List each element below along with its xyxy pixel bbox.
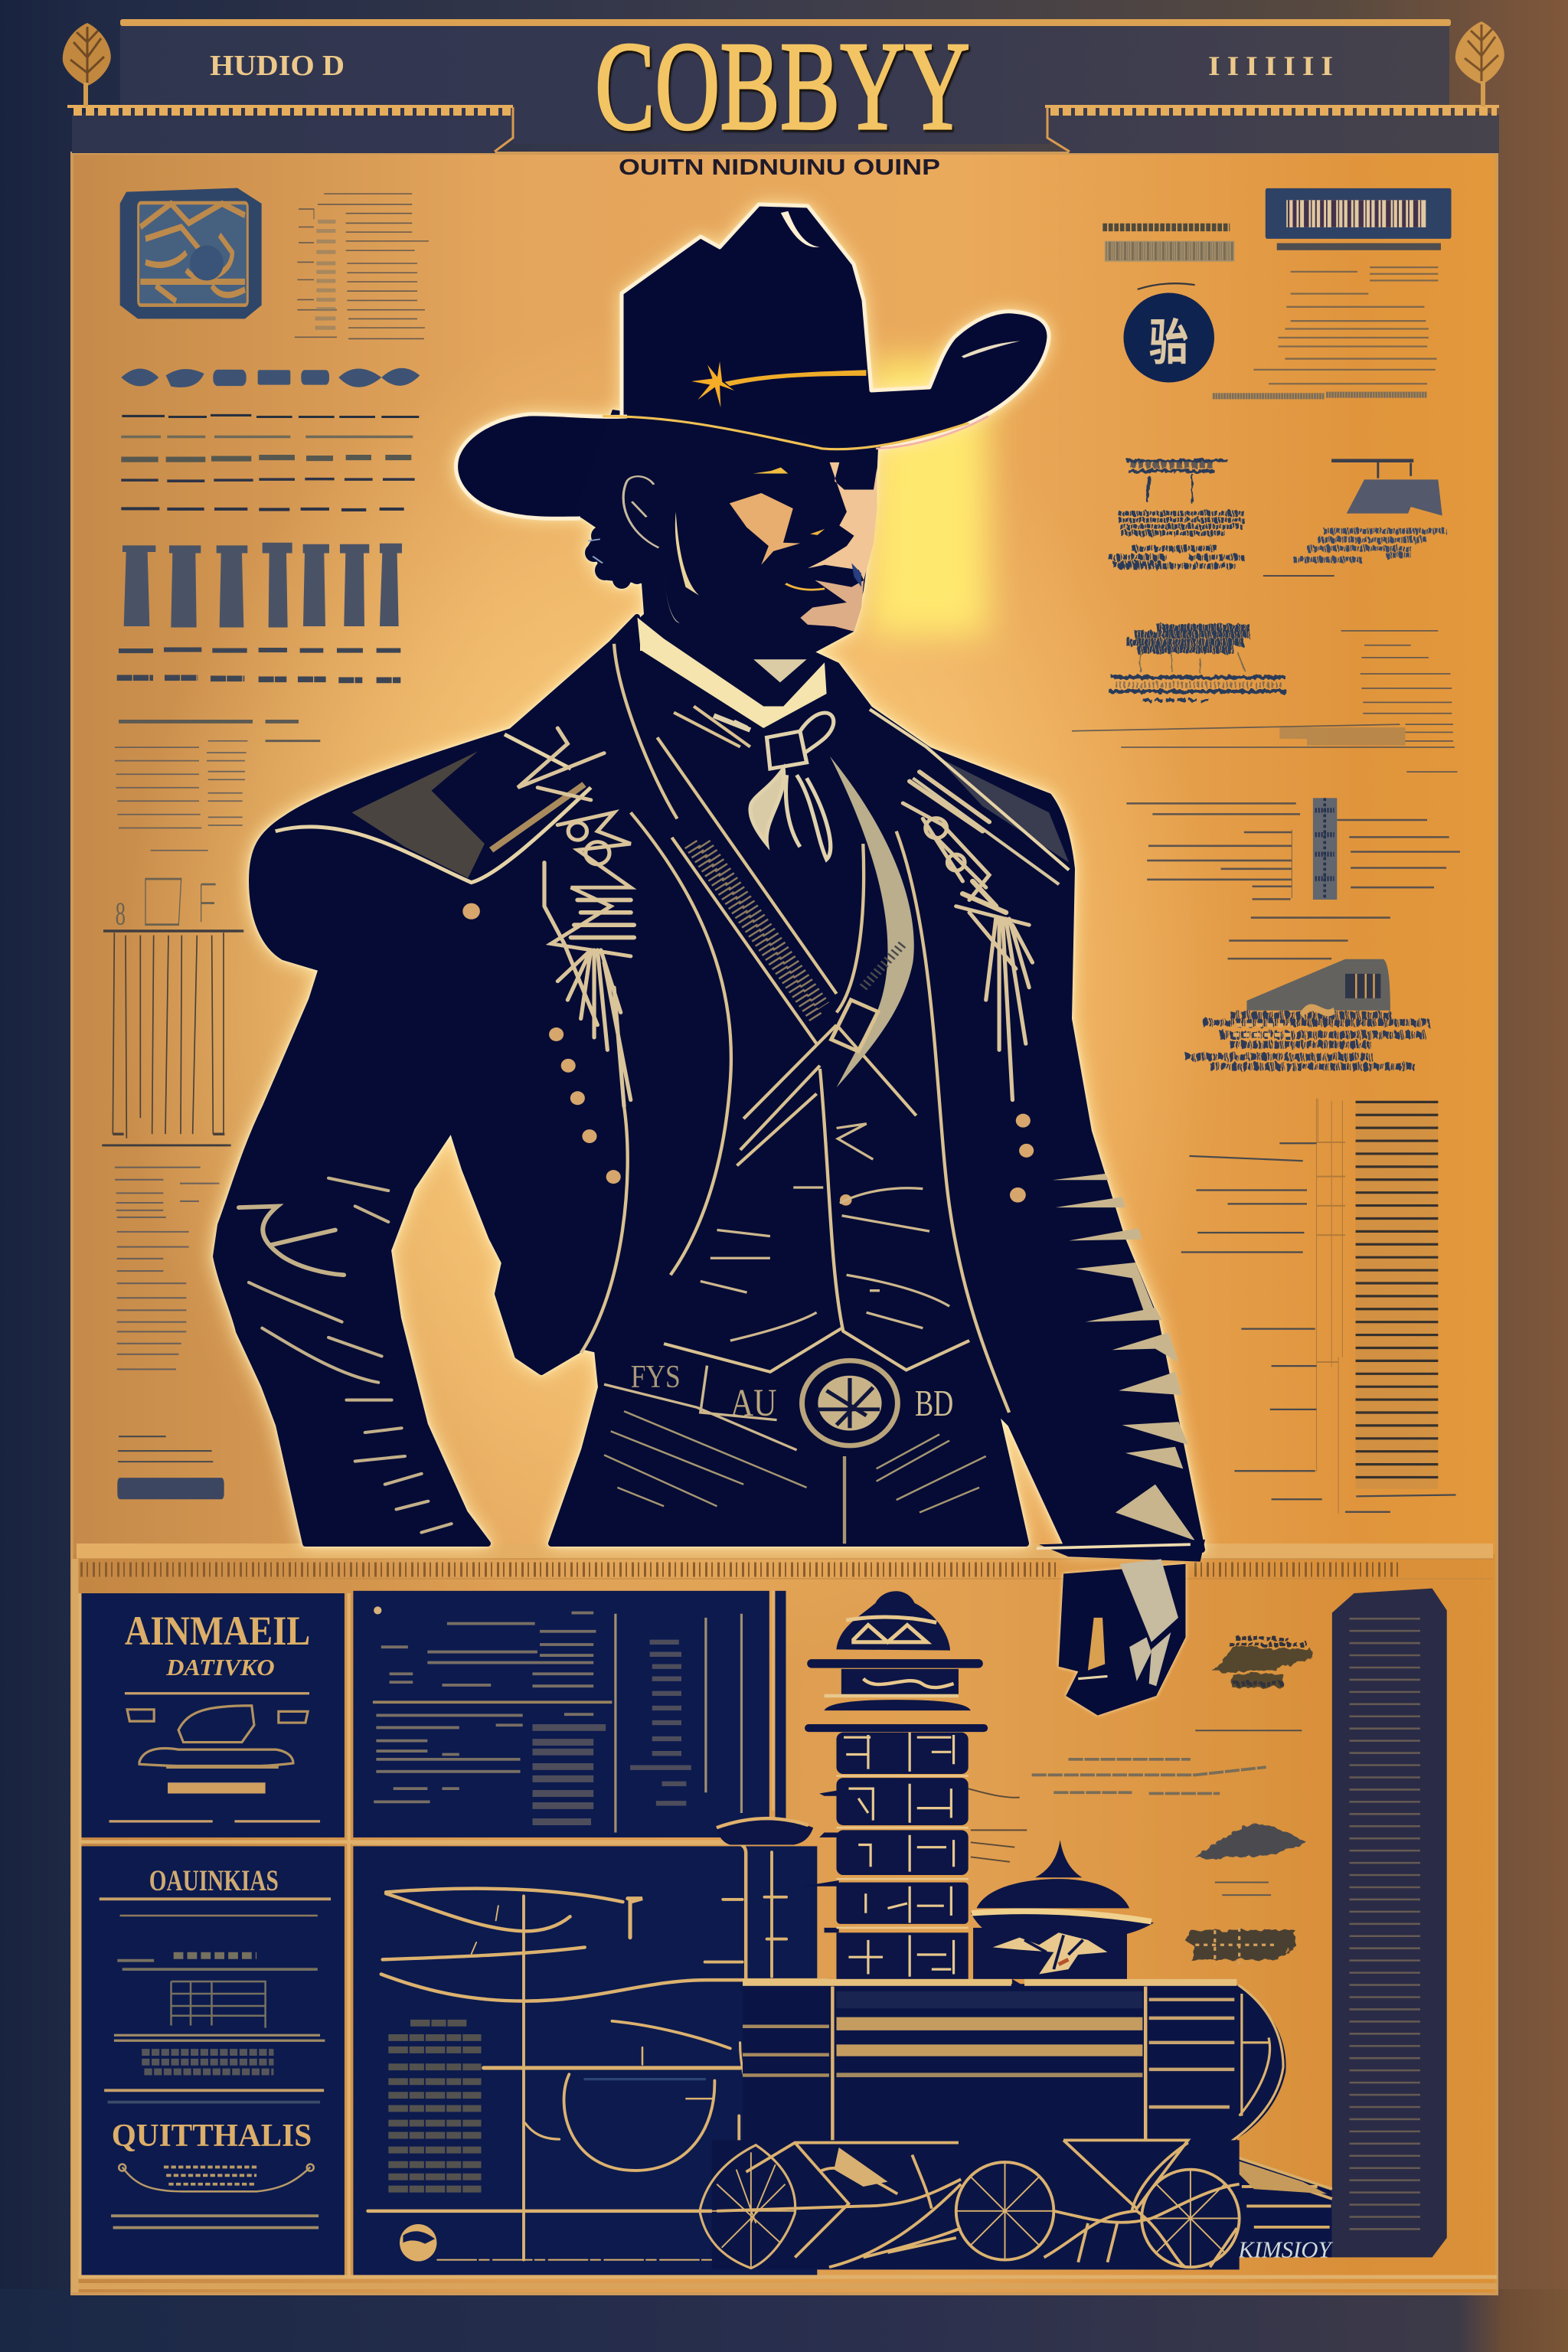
text lines [1253, 267, 1438, 384]
text lines [115, 741, 247, 851]
right sketches [1032, 1637, 1312, 1965]
text lines and tower [1126, 798, 1460, 959]
pagoda tower [802, 1591, 1027, 1979]
trousers folds [604, 1411, 986, 1544]
title: COBBYY [595, 15, 970, 156]
jacket details [239, 618, 1195, 1544]
torso silhouette [216, 617, 1202, 1550]
icon: small coin [400, 2224, 436, 2262]
right dark tower panel [1332, 1589, 1447, 2257]
left column lower [102, 721, 320, 1499]
icon: round seal: 骀 [1149, 316, 1188, 371]
figure: cowboy [216, 204, 1202, 1550]
cravat [714, 713, 834, 859]
blueprint grid [388, 2023, 482, 2189]
wheel: front left [700, 2145, 795, 2268]
header label right: IIIIIII [1208, 51, 1340, 81]
bottom section strip [77, 1544, 1493, 1579]
text block lines [295, 194, 429, 338]
footer bar [117, 1478, 224, 1499]
cowcatcher: KIMSIOY [1237, 2236, 1334, 2262]
sketch: blueprint [114, 1955, 325, 2072]
panel: lower left: OAUINKIAS [149, 1864, 279, 1897]
frame rules [80, 1593, 743, 2277]
epaulet right [870, 710, 1069, 884]
title badge [1266, 188, 1452, 250]
right sleeve folds [1052, 1174, 1195, 1540]
embroidery right [903, 772, 1032, 1100]
icon: round seal [1123, 292, 1214, 383]
hat details [603, 211, 1020, 449]
panel heading: AINMAEIL [125, 1608, 310, 1654]
subtitle: OUITN NIDNUINU OUINP [619, 155, 940, 180]
sash [830, 756, 914, 1087]
hat outline [456, 204, 1049, 518]
cowcatcher [1205, 2145, 1334, 2262]
boiler [743, 1979, 1286, 2143]
right column upper [1072, 188, 1457, 772]
label strip [1102, 227, 1234, 289]
running gear [700, 2140, 1240, 2269]
buckle strap [831, 1000, 878, 1051]
small labels diagram [102, 879, 243, 1145]
strap hatch [691, 844, 823, 1019]
panel: lower middle diagram [351, 1844, 827, 2275]
icon: anvil diagram [127, 1706, 308, 1794]
panel: top left [80, 1593, 345, 1838]
header fringe right [1045, 105, 1499, 152]
thumb gap [1088, 1618, 1105, 1671]
bottom left panels [80, 1591, 827, 2277]
text lines [115, 1168, 220, 1369]
icon: ornamental emblem [120, 188, 262, 318]
table rows [121, 415, 419, 510]
panel: lower left [80, 1846, 345, 2275]
sketch: bridge one [1109, 461, 1244, 566]
icon: right tree ornament [1455, 21, 1504, 106]
belt [604, 1359, 953, 1450]
columns [122, 543, 402, 627]
sketch: bridge two [1109, 628, 1286, 701]
collar [637, 618, 827, 728]
panel heading: QUITTHALIS [112, 2118, 312, 2154]
embroidery left [518, 728, 634, 1106]
dome building [971, 1840, 1154, 1979]
bottom frame [72, 1559, 1497, 2292]
section heading bars [119, 719, 299, 724]
right column lower [1126, 798, 1460, 1514]
sketch: train depot [1185, 959, 1430, 1067]
table header ovals [121, 368, 420, 387]
face details [588, 462, 877, 632]
epaulet left [276, 734, 591, 883]
head silhouette [574, 410, 878, 727]
belt: BD [915, 1382, 953, 1424]
cuff [1039, 1540, 1205, 1562]
text lines [1072, 631, 1457, 772]
jacket edges [581, 644, 1009, 1413]
locomotive [700, 1979, 1334, 2269]
small domed pagoda left [716, 1591, 813, 1844]
hand [1037, 1540, 1205, 1715]
header fringe left [67, 105, 513, 152]
top gold bar [120, 19, 1451, 26]
icon: left tree ornament [63, 23, 111, 106]
belt: AU [730, 1381, 777, 1425]
small labels diagram: 8 [116, 897, 126, 933]
bottom margin [0, 2289, 1568, 2352]
waistcoat folds [701, 1124, 949, 1341]
left column upper [117, 188, 429, 680]
buttons [462, 903, 1034, 1206]
header banner [72, 19, 1499, 153]
belt: FYS [631, 1359, 681, 1395]
hat silhouette [456, 204, 1049, 518]
text ladder [1181, 1099, 1456, 1514]
sketch: station [1263, 461, 1446, 576]
header label left: HUDIO D [210, 50, 345, 82]
panel: top middle table [353, 1591, 786, 1838]
panel: top left: DATIVKO [165, 1655, 275, 1681]
left sleeve folds [239, 1178, 452, 1533]
icon: small boat [119, 2164, 314, 2191]
